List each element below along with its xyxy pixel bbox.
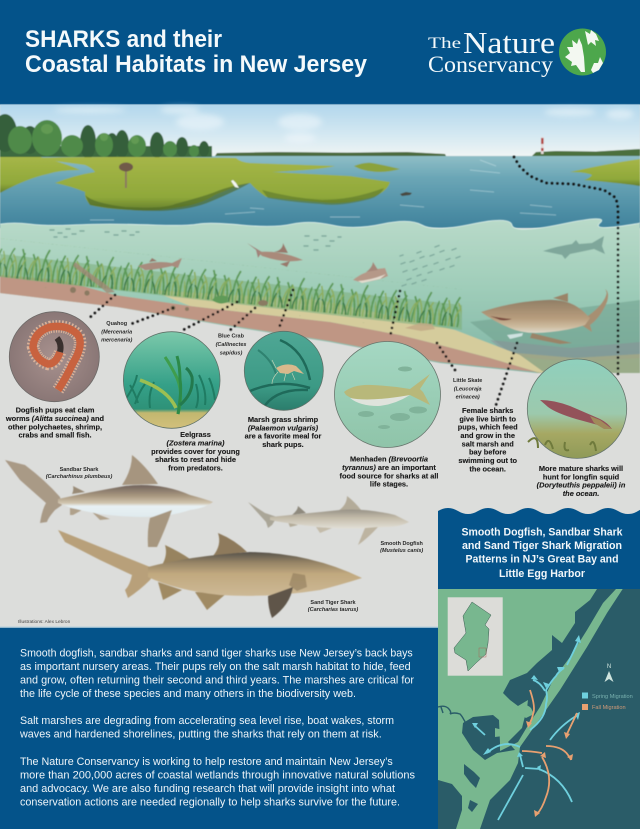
ducks	[400, 192, 412, 196]
caption: dogfish pups: other polychaetes, shrimp,	[8, 422, 102, 431]
caption: marsh grass shrimp: Marsh grass shrimp	[248, 415, 319, 424]
caption: eelgrass: sharks to rest and hide	[155, 455, 236, 464]
small shark	[353, 262, 388, 283]
label: little skate: Little Skate	[453, 378, 482, 384]
caption: eelgrass: Eelgrass	[180, 430, 211, 439]
circle: menhaden	[334, 342, 440, 448]
illustration: sand tiger shark	[58, 530, 362, 618]
sand bed	[150, 290, 545, 373]
compass north arrow: N	[607, 664, 611, 670]
tree line	[0, 114, 212, 159]
paragraph: nursery areas: Smooth dogfish, sandbar sharks and sand tiger sharks use New Jersey’s back bays	[20, 648, 413, 660]
title: Coastal Habitats in New Jersey	[25, 51, 367, 78]
paragraph: nursery areas	[20, 648, 414, 700]
inset: New Jersey locator	[448, 597, 503, 676]
paragraph: nursery areas: and grow, often returning their second and third years. The marshes are critical for	[20, 675, 414, 687]
circle: clam worm	[9, 312, 99, 402]
label: sandbar shark: Sandbar Shark	[60, 467, 99, 473]
caption: female sharks: pups, which feed	[458, 423, 518, 432]
circle: eelgrass	[123, 332, 220, 428]
caption: female sharks: salt marsh and	[462, 439, 514, 448]
caption: female sharks: Female sharks	[462, 406, 513, 415]
caption: female sharks: the ocean.	[469, 464, 506, 473]
water column	[0, 219, 640, 373]
caption: mature sharks: More mature sharks will	[539, 464, 623, 473]
label: little skate: (Leucoraja	[454, 386, 482, 392]
map heading: Patterns in NJ’s Great Bay and	[466, 554, 619, 566]
map back bay	[462, 589, 616, 760]
paragraph: threats	[19, 715, 394, 741]
caption: female sharks: give live birth to	[459, 414, 517, 423]
map lower creeks	[438, 764, 480, 829]
circle: longfin squid	[527, 359, 627, 458]
map legend	[582, 692, 633, 711]
map heading panel with wave top	[438, 508, 640, 589]
caption: marsh grass shrimp: shark pups.	[262, 440, 304, 449]
illustration: underwater scene	[0, 157, 640, 405]
paragraph: conservation work: The Nature Conservancy is working to help restore and maintain New Jersey’s	[20, 756, 393, 768]
panel: body text	[0, 626, 438, 829]
paragraph: threats: waves and hardened shorelines, putting the sharks that rely on them at risk.	[19, 729, 382, 741]
caption: female sharks: swimming out to	[458, 456, 518, 465]
sea bed haze	[470, 300, 640, 373]
paragraph: conservation work: conservation actions are needed regionally to help sharks survive for the future.	[20, 797, 400, 809]
map heading: and Sand Tiger Shark Migration	[462, 540, 622, 552]
label: blue crab: (Callinectes	[216, 342, 246, 348]
salt marsh right bank	[570, 159, 640, 186]
illustration: sandbar shark	[5, 455, 213, 547]
small shark	[247, 243, 303, 267]
bay water	[0, 156, 640, 228]
mud bank	[0, 275, 537, 372]
label: little skate: erinacea)	[456, 394, 480, 400]
dotted leader lines	[87, 157, 618, 405]
map land	[438, 589, 640, 829]
seabed critters	[70, 287, 268, 311]
caption: dogfish pups: crabs and small fish.	[18, 431, 92, 440]
label: sand tiger shark: Sand Tiger Shark	[310, 600, 357, 606]
small shark	[138, 258, 182, 270]
title: SHARKS and their	[25, 26, 222, 53]
distant shark silhouette	[543, 236, 605, 259]
caption: dogfish pups: worms (Alitta succinea) and	[6, 414, 104, 423]
label: blue crab: sapidus)	[220, 350, 242, 356]
label: smooth dogfish: Smooth Dogfish	[380, 541, 424, 547]
label: sand tiger shark: (Carcharias taurus)	[308, 607, 358, 613]
header band	[0, 0, 640, 104]
title	[25, 26, 367, 78]
paragraph: threats: Salt marshes are degrading from accelerating sea level rise, boat wakes, storm	[20, 715, 394, 727]
caption: mature sharks: hunt for longfin squid	[543, 472, 620, 481]
label: quahog: Quahog	[106, 321, 127, 327]
arrows: spring migration	[472, 635, 581, 820]
caption: menhaden: Menhaden (Brevoortia	[350, 455, 428, 464]
panel: migration map	[438, 508, 640, 829]
compass north arrow	[604, 664, 614, 682]
paragraph: conservation work	[20, 756, 415, 809]
small marsh island	[354, 163, 400, 172]
caption: female sharks: and grow in the	[460, 431, 515, 440]
caption: mature sharks: the ocean.	[563, 489, 599, 498]
map heading	[462, 527, 623, 580]
fish schools	[50, 229, 460, 286]
arrows: fall migration	[522, 690, 577, 817]
circle: marsh grass shrimp	[244, 331, 323, 410]
caption: marsh grass shrimp: (Palaemon vulgaris)	[248, 423, 319, 432]
olive sea floor strip	[505, 352, 640, 373]
salt marsh main island	[32, 157, 390, 211]
far shore left	[215, 152, 446, 156]
logo: The Nature Conservancy	[428, 25, 606, 77]
sky	[0, 104, 640, 156]
label: sandbar shark: (Carcharhinus plumbeus)	[46, 474, 112, 480]
label: blue crab: Blue Crab	[218, 334, 245, 340]
caption: menhaden: tyrannus) are an important	[342, 463, 436, 472]
label: smooth dogfish: (Mustelus canis)	[380, 548, 423, 554]
map legend: Spring Migration	[592, 694, 633, 700]
sea grass beds	[0, 238, 464, 333]
logo: The Nature Conservancy: Nature	[463, 25, 555, 60]
map ocean	[480, 589, 640, 829]
map marsh islands	[495, 705, 534, 737]
caption: mature sharks: (Doryteuthis peppaleii) in	[537, 481, 626, 490]
caption: eelgrass: (Zostera marina)	[167, 438, 225, 448]
map heading: Little Egg Harbor	[499, 568, 586, 580]
salt marsh left bank	[0, 157, 80, 193]
map legend: Fall Migration	[592, 705, 626, 711]
caption: eelgrass: from predators.	[168, 464, 223, 472]
paragraph: nursery areas: as important nursery areas. Their pups rely on the salt marsh habitat to hide, feed	[20, 661, 411, 673]
caption: menhaden: food source for sharks at all	[340, 471, 438, 480]
paragraph: conservation work: and advocacy. We are also funding research that will provide insight into what	[20, 783, 396, 795]
logo: The Nature Conservancy: Conservancy	[428, 52, 554, 77]
osprey nest platform	[119, 162, 133, 188]
illustration credit: Illustrations: Alex Lebron	[18, 619, 71, 625]
illustration: smooth dogfish	[248, 496, 409, 545]
label: quahog: mercenaria)	[101, 338, 132, 344]
caption: female sharks: bay before	[469, 448, 506, 457]
caption: dogfish pups: Dogfish pups eat clam	[16, 406, 95, 414]
far shore right with lighthouse	[532, 137, 640, 157]
label: quahog: (Mercenaria	[101, 329, 132, 335]
caption: menhaden: life stages.	[370, 480, 408, 489]
caption: marsh grass shrimp: are a favorite meal for	[245, 432, 322, 441]
paragraph: nursery areas: the life cycle of these species and many others in the biodiversity web.	[20, 688, 356, 700]
paragraph: conservation work: more than 200,000 acres of coastal wetlands through innovative natural solutions	[20, 770, 415, 782]
logo: The Nature Conservancy: The	[428, 35, 461, 52]
caption: eelgrass: provides cover for young	[151, 447, 240, 456]
egret	[231, 180, 239, 188]
adult sand tiger shark	[481, 289, 608, 344]
illustration: marsh scene above water	[0, 104, 640, 228]
map heading: Smooth Dogfish, Sandbar Shark	[462, 527, 623, 539]
